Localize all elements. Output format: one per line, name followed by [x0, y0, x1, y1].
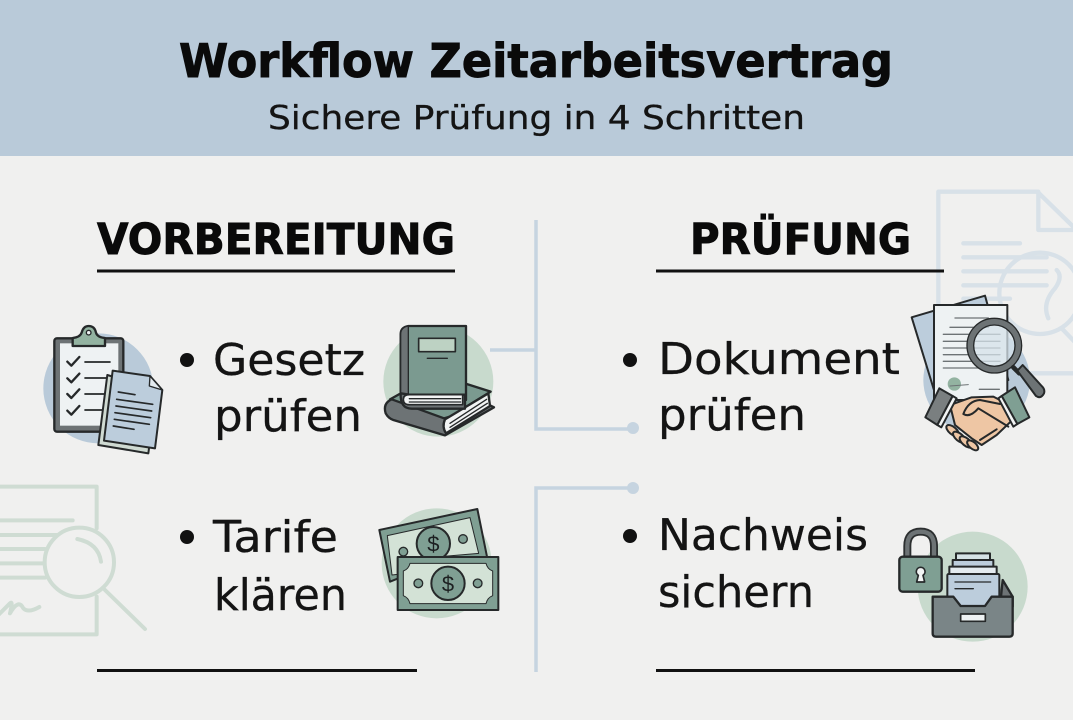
icon: document, magnifier and handshake	[912, 296, 1044, 452]
title: Workflow Zeitarbeitsvertrag	[179, 34, 893, 88]
step: Dokument prüfen: Dokument	[658, 334, 900, 385]
subtitle: Sichere Prüfung in 4 Schritten	[268, 98, 805, 137]
right column bottom rule	[656, 669, 975, 672]
step: Tarife klären	[180, 512, 347, 621]
step: Nachweis sichern: Nachweis	[658, 510, 868, 561]
left column heading: VORBEREITUNG: VORBEREITUNG	[97, 215, 455, 265]
left column bottom rule	[97, 669, 417, 672]
icon: banknotes: $	[442, 571, 454, 596]
step: Gesetz prüfen: prüfen	[214, 391, 362, 442]
header band	[0, 0, 1073, 156]
right column heading: PRÜFUNG	[656, 214, 944, 272]
step: Gesetz prüfen: Gesetz	[213, 335, 365, 386]
step: Nachweis sichern: sichern	[658, 567, 814, 618]
step: Tarife klären: Tarife	[212, 512, 338, 563]
icon: clipboard and documents	[43, 326, 162, 453]
right column heading: PRÜFUNG: PRÜFUNG	[690, 214, 911, 265]
step: Dokument prüfen	[623, 334, 900, 441]
background watermark: contract magnifier bottom left	[0, 487, 145, 634]
icon: padlock and file drawer	[899, 532, 1028, 642]
step: Nachweis sichern	[623, 510, 868, 618]
step: Dokument prüfen: prüfen	[658, 390, 806, 441]
connector lines	[490, 220, 639, 672]
icon: banknotes	[379, 508, 498, 618]
icon: banknotes: $	[427, 532, 439, 557]
background watermark: contract document top right	[938, 192, 1073, 373]
step: Gesetz prüfen	[180, 335, 365, 442]
step: Tarife klären: klären	[214, 570, 347, 621]
icon: stacked books	[383, 326, 494, 437]
